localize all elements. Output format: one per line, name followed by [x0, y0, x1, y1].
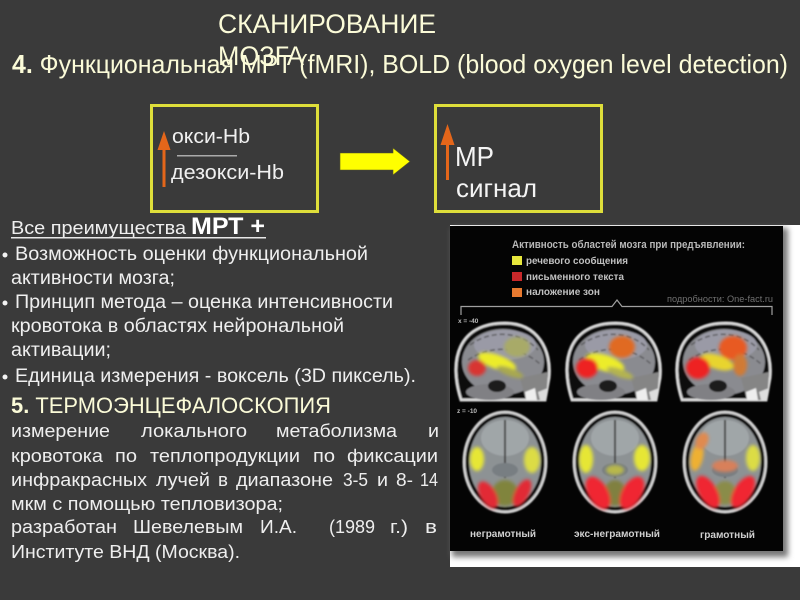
text block: thermoencephaloscopy description: диапазоне — [236, 470, 333, 490]
panel: MR signal box — [436, 106, 602, 212]
brain scan: ex-illiterate axial — [574, 412, 656, 514]
subheading: all MRI advantages: Все преимущества — [11, 217, 187, 238]
label: deoxy-Hb: дезокси-Hb — [171, 162, 284, 184]
text block: thermoencephaloscopy description: по — [313, 446, 335, 466]
heading: functional MRI: 4. Функциональная МРТ (fMRI), BOLD (blood oxygen level detection) — [12, 49, 788, 79]
legend: наложение зон — [526, 286, 600, 298]
text block: thermoencephaloscopy description: 14 — [420, 470, 438, 490]
fraction line — [177, 155, 237, 156]
subheading: all MRI advantages — [11, 213, 266, 240]
title: СКАНИРОВАНИЕ — [218, 9, 436, 39]
legend: письменного текста — [526, 271, 624, 283]
brain scan: literate axial — [684, 412, 766, 512]
text block: thermoencephaloscopy description: и — [428, 421, 439, 441]
slice label z: z = -10 — [457, 408, 477, 415]
brain scan: literate sagittal — [677, 323, 770, 400]
bullet list: Единица измерения - воксель (3D пиксель). — [15, 366, 416, 387]
label: MR signal: МР — [455, 141, 494, 172]
slice label x: x = -40 — [458, 318, 479, 325]
text block: thermoencephaloscopy description: Шевелевым — [133, 517, 243, 537]
text block: thermoencephaloscopy description: кровотока — [11, 446, 104, 466]
text block: thermoencephaloscopy description: г.) — [390, 517, 408, 537]
text block: thermoencephaloscopy description: локального — [141, 421, 247, 441]
label: oxy-Hb: окси-Hb — [172, 126, 250, 148]
text block: thermoencephaloscopy description: метаболизма — [276, 421, 398, 441]
icon: orange up arrow — [158, 131, 170, 187]
image title: Активность областей мозга при предъявлении: — [512, 239, 745, 251]
bracket — [461, 300, 772, 315]
text block: thermoencephaloscopy description: 3-5 — [343, 470, 368, 490]
title: МОЗГА — [218, 41, 304, 71]
brain scan: ex-illiterate sagittal — [567, 323, 660, 400]
text block: thermoencephaloscopy description: разработан — [11, 517, 117, 537]
text block: thermoencephaloscopy description: теплопродукции — [150, 446, 300, 466]
bullet list: активности мозга; — [11, 268, 175, 289]
text block: thermoencephaloscopy description: и — [377, 470, 388, 490]
text block: thermoencephaloscopy description: фиксации — [347, 446, 438, 466]
brain scan: illiterate sagittal — [456, 323, 549, 400]
caption: literate: грамотный — [700, 529, 755, 541]
bullet list: Принцип метода – оценка интенсивности — [15, 292, 393, 313]
panel: oxy/deoxy Hb box — [152, 106, 318, 212]
legend — [512, 255, 628, 298]
caption: illiterate: неграмотный — [470, 528, 536, 540]
caption: ex-illiterate: экс-неграмотный — [574, 528, 660, 540]
bullet list: кровотока в областях нейрональной — [11, 316, 344, 337]
heading: thermoencephaloscopy: 5. ТЕРМОЭНЦЕФАЛОСКОПИЯ — [11, 393, 331, 418]
source note: подробности: One-fact.ru — [667, 294, 773, 304]
arrow: yellow right arrow — [340, 148, 410, 175]
text block: thermoencephaloscopy description: по — [115, 446, 137, 466]
text block: thermoencephaloscopy description: мкм с помощью тепловизора; — [11, 494, 283, 514]
text block: thermoencephaloscopy description — [11, 421, 439, 562]
title — [218, 9, 436, 71]
text block: thermoencephaloscopy description: инфракрасных — [11, 470, 147, 490]
text block: thermoencephaloscopy description: в — [425, 517, 437, 537]
icon: orange up arrow — [440, 124, 454, 180]
text block: thermoencephaloscopy description: (1989 — [329, 517, 375, 537]
text block: thermoencephaloscopy description: Институте ВНД (Москва). — [11, 542, 240, 562]
text block: thermoencephaloscopy description: лучей — [156, 470, 210, 490]
text block: thermoencephaloscopy description: измерение — [11, 421, 110, 441]
text block: thermoencephaloscopy description: И.А. — [260, 517, 297, 537]
legend: речевого сообщения — [526, 255, 628, 267]
text block: thermoencephaloscopy description: 8- — [396, 470, 413, 490]
text block: thermoencephaloscopy description: в — [218, 470, 228, 490]
panel: brain activity image — [450, 225, 800, 567]
text block: MRI advantages — [2, 213, 416, 387]
brain scan: illiterate axial — [464, 412, 546, 512]
panel: MR signal box: сигнал — [456, 173, 537, 203]
bullet list: Возможность оценки функциональной — [15, 244, 368, 265]
bullet list: активации; — [11, 340, 111, 361]
bullet list — [2, 244, 416, 387]
subheading: all MRI advantages: МРТ + — [191, 213, 265, 240]
